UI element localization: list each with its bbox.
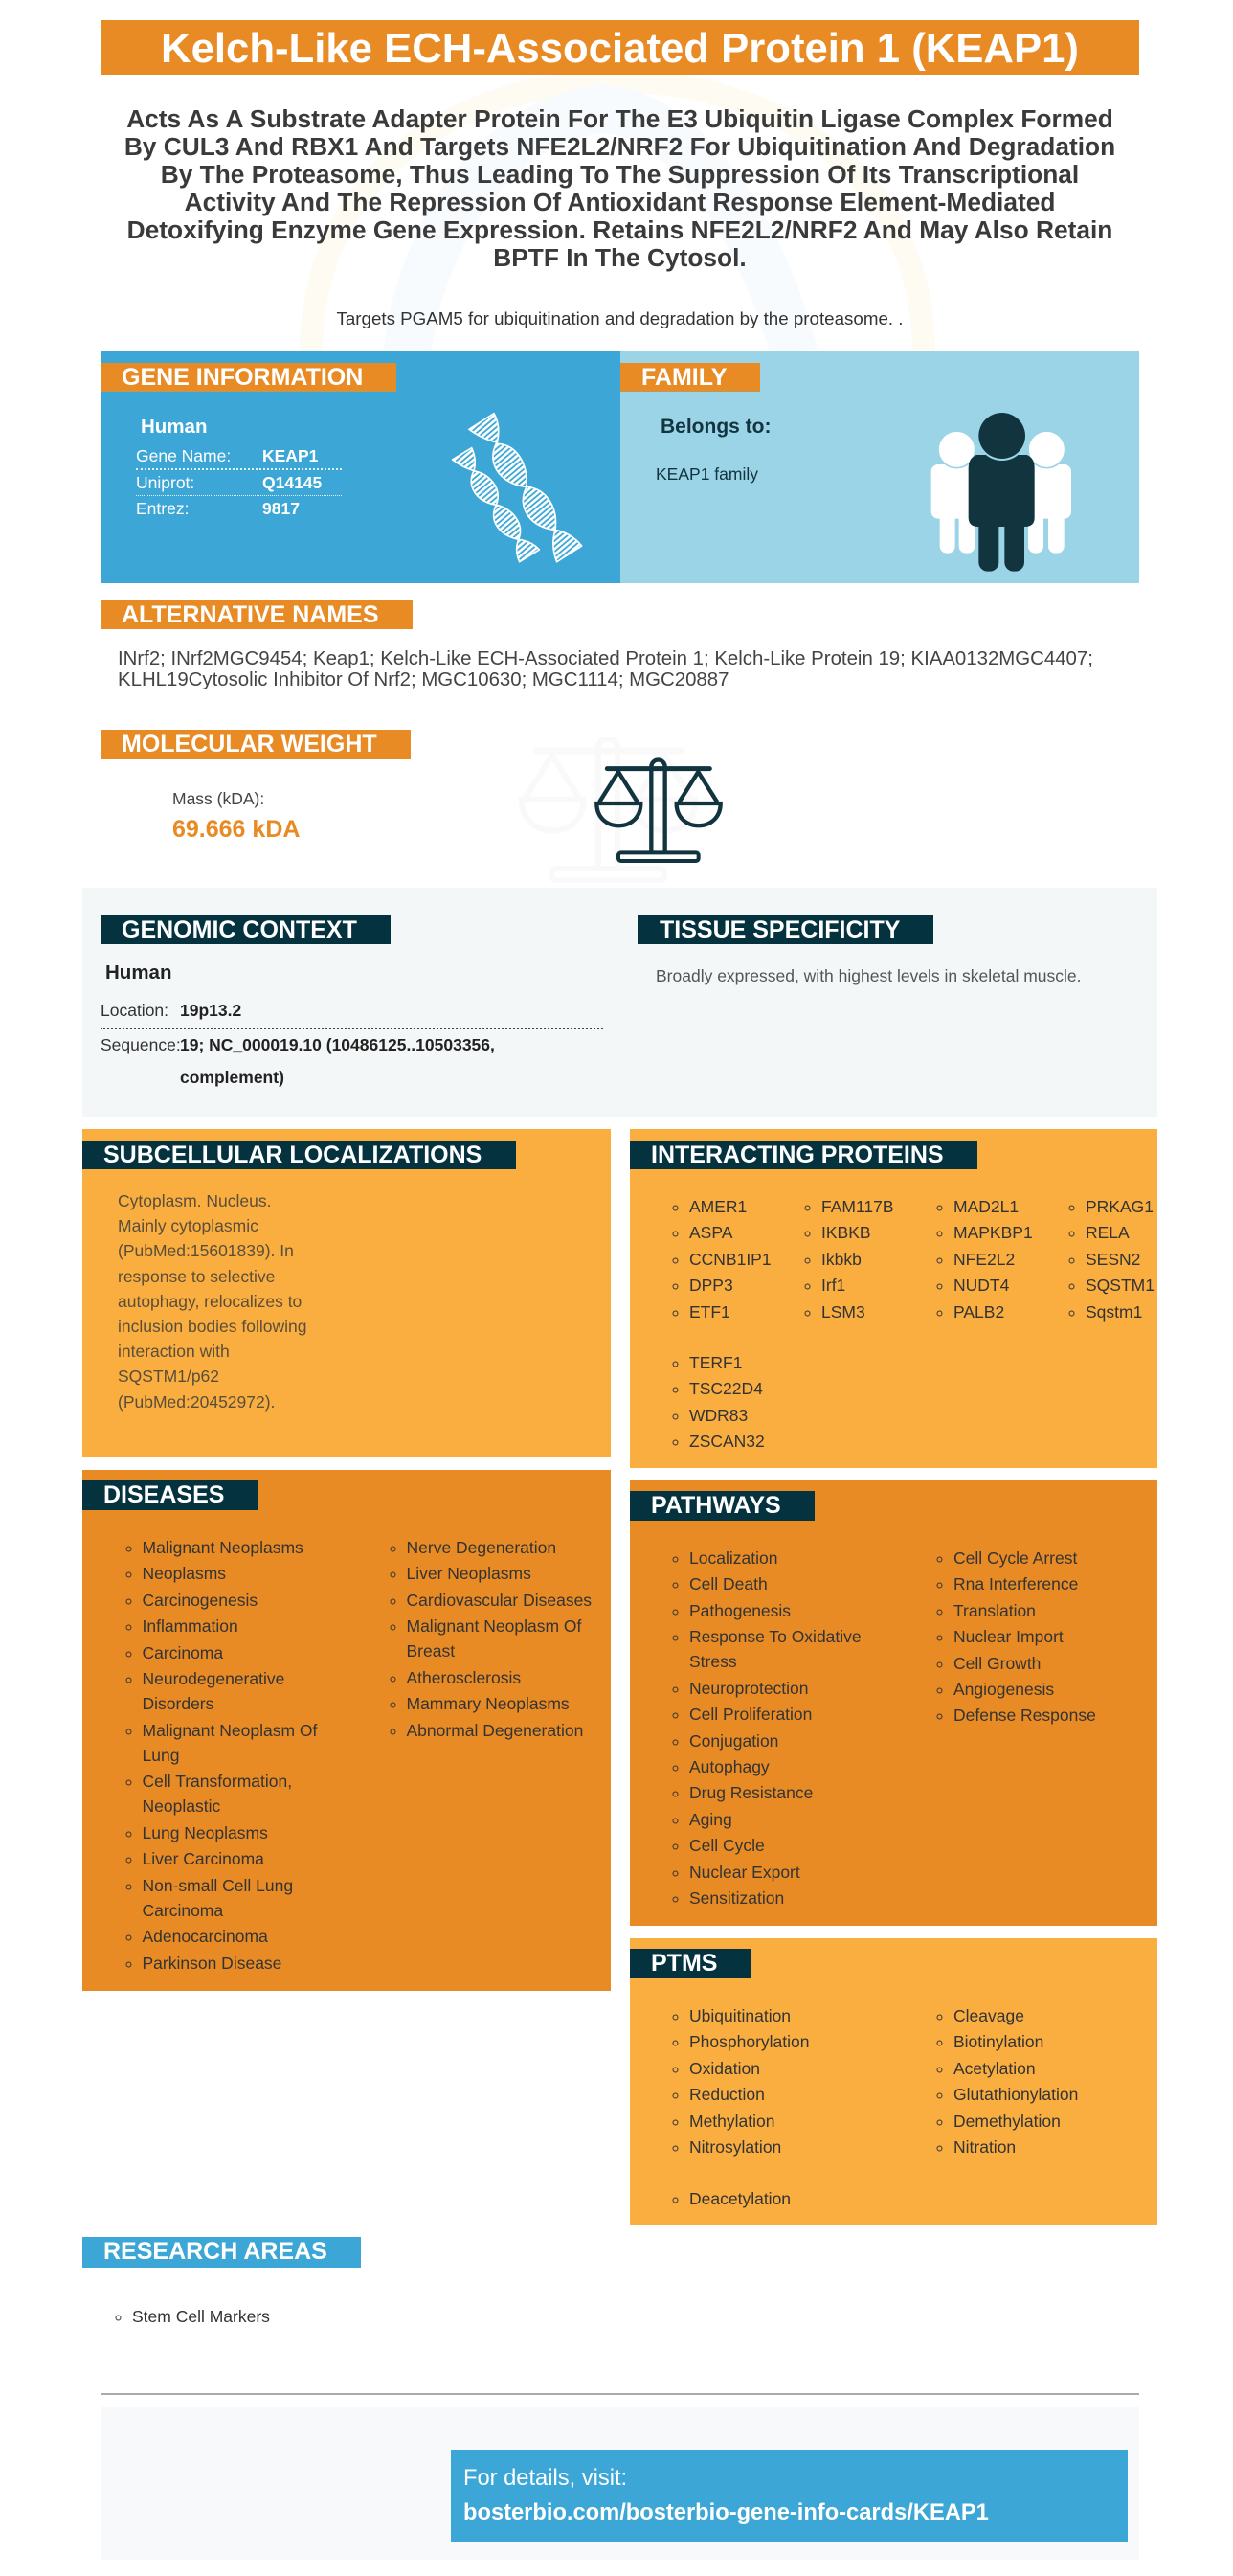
heading: molecular weight: MOLECULAR WEIGHT — [122, 731, 377, 757]
disease list column 2: Nerve Degeneration — [406, 1538, 556, 1557]
callout: details link: For details, visit: — [463, 2466, 627, 2491]
disease list column 1: Adenocarcinoma — [142, 1927, 268, 1946]
background watermark logo — [300, 75, 935, 351]
gene facts table — [136, 446, 342, 518]
description: Detoxifying Enzyme Gene Expression. Retains NFE2L2/NRF2 And May Also Retain — [127, 215, 1112, 243]
disease list column 2: Cardiovascular Diseases — [406, 1591, 592, 1610]
description — [124, 103, 1115, 272]
icon: balance scale with faint shadow — [594, 757, 723, 863]
alternative names text: KLHL19Cytosolic Inhibitor Of Nrf2; MGC10630; MGC1114; MGC20887 — [118, 669, 729, 690]
heading: research areas: RESEARCH AREAS — [103, 2238, 327, 2265]
panel: gene information — [101, 351, 620, 583]
disease list column 1: Inflammation — [142, 1616, 238, 1636]
gene facts table: Uniprot: — [136, 473, 194, 492]
protein list second group — [672, 1353, 765, 1451]
localization text — [118, 1191, 306, 1412]
disease list column 1: Parkinson Disease — [142, 1954, 281, 1973]
disease list column 1: Lung — [142, 1746, 179, 1765]
disease list column 1: Carcinogenesis — [142, 1591, 258, 1610]
PTM list column 1: Methylation — [689, 2112, 775, 2131]
panel: genomic context and tissue specificity — [82, 888, 1157, 1117]
family name: KEAP1 family — [656, 464, 758, 484]
protein list column 4: Sqstm1 — [1086, 1302, 1142, 1322]
protein list column 1: CCNB1IP1 — [689, 1250, 772, 1269]
sequence — [101, 1028, 603, 1093]
PTM list column 2: Acetylation — [953, 2059, 1036, 2078]
sequence: complement) — [180, 1068, 284, 1087]
species label: Human — [141, 416, 207, 438]
disease list column 2: Malignant Neoplasm Of — [406, 1616, 581, 1636]
gene facts table: KEAP1 — [262, 446, 318, 465]
icon: group of people — [930, 413, 1071, 572]
pathway list column 2: Cell Cycle Arrest — [953, 1548, 1077, 1568]
protein list column 4: PRKAG1 — [1086, 1197, 1154, 1216]
sequence: 19; NC_000019.10 (10486125..10503356, — [180, 1035, 495, 1054]
pathway list column 1: Stress — [689, 1652, 737, 1671]
pathway list column 2: Angiogenesis — [953, 1680, 1054, 1699]
title: Kelch-Like ECH-Associated Protein 1 (KEAP1) — [161, 25, 1079, 72]
localization text: Cytoplasm. Nucleus. — [118, 1191, 271, 1210]
protein list column 3: NUDT4 — [953, 1276, 1009, 1295]
tissue specificity text: Broadly expressed, with highest levels in skeletal muscle. — [656, 966, 1082, 985]
pathway list column 1: Neuroprotection — [689, 1679, 809, 1698]
mass label: Mass (kDA): — [172, 789, 264, 808]
sequence: Sequence: — [101, 1035, 181, 1054]
pathway list column 1: Localization — [689, 1548, 777, 1568]
PTM list column 2: Demethylation — [953, 2112, 1061, 2131]
disease list column 1: Malignant Neoplasm Of — [142, 1721, 317, 1740]
pathway list column 2: Translation — [953, 1601, 1036, 1620]
panel: subcellular localizations — [82, 1129, 611, 1457]
pathway list column 1: Aging — [689, 1810, 732, 1829]
description: Acts As A Substrate Adapter Protein For The E3 Ubiquitin Ligase Complex Formed — [126, 103, 1113, 132]
panel: family — [620, 351, 1139, 583]
disease list column 2: Breast — [406, 1641, 455, 1661]
pathway list column 2 — [936, 1548, 1096, 1725]
heading: pathways — [630, 1491, 815, 1521]
protein list column 3: MAD2L1 — [953, 1197, 1019, 1216]
protein list second group: TSC22D4 — [689, 1379, 763, 1398]
pathway list column 2: Defense Response — [953, 1706, 1096, 1725]
disease list column 2: Mammary Neoplasms — [406, 1694, 570, 1713]
PTM list column 1: Reduction — [689, 2085, 765, 2104]
genomic location: Location: — [101, 1001, 168, 1020]
disease list column 2: Liver Neoplasms — [406, 1564, 531, 1583]
PTM list column 2: Cleavage — [953, 2006, 1024, 2025]
PTM list column 2: Biotinylation — [953, 2032, 1043, 2051]
protein list second group: TERF1 — [689, 1353, 742, 1372]
heading: genomic context: GENOMIC CONTEXT — [122, 916, 357, 943]
description: By The Proteasome, Thus Leading To The Suppression Of Its Transcriptional — [161, 159, 1079, 188]
disease list column 1: Carcinoma — [142, 1643, 223, 1662]
protein list column 4: SQSTM1 — [1086, 1276, 1155, 1295]
protein list second group: ZSCAN32 — [689, 1432, 765, 1451]
localization text: interaction with — [118, 1342, 230, 1361]
gene facts table: Entrez: — [136, 499, 189, 518]
belongs to label: Belongs to: — [661, 416, 772, 438]
pathway list column 1: Response To Oxidative — [689, 1627, 862, 1646]
species label: Human — [105, 961, 171, 983]
protein list column 1: AMER1 — [689, 1197, 747, 1216]
PTM list column 1: Nitrosylation — [689, 2137, 781, 2157]
panel: diseases — [82, 1470, 611, 1991]
disease list column 1: Carcinoma — [142, 1901, 223, 1920]
panel: interacting proteins — [630, 1129, 1157, 1468]
gene facts table: Q14145 — [262, 473, 322, 492]
panel: pathways — [630, 1480, 1157, 1926]
PTM list column 2: Glutathionylation — [953, 2085, 1078, 2104]
alternative names text — [118, 648, 1093, 690]
pathway list column 1: Nuclear Export — [689, 1863, 800, 1882]
disease list column 1: Liver Carcinoma — [142, 1849, 264, 1868]
callout: details link — [451, 2450, 1128, 2542]
disease list column 1: Neoplastic — [142, 1796, 220, 1816]
heading: PTMs: PTMS — [651, 1950, 717, 1977]
heading: family — [620, 363, 760, 392]
description: By CUL3 And RBX1 And Targets NFE2L2/NRF2 For Ubiquitination And Degradation — [124, 132, 1115, 161]
gene facts table: Gene Name: — [136, 446, 231, 465]
disease list column 1: Lung Neoplasms — [142, 1823, 268, 1842]
localization text: inclusion bodies following — [118, 1317, 306, 1336]
protein list column 1: ETF1 — [689, 1302, 730, 1322]
pathway list column 1 — [672, 1548, 862, 1908]
protein list column 4: RELA — [1086, 1223, 1130, 1242]
disease list column 1: Neurodegenerative — [142, 1669, 284, 1688]
protein list column 3: MAPKBP1 — [953, 1223, 1033, 1242]
heading: gene information: GENE INFORMATION — [122, 364, 363, 391]
pathway list column 1: Cell Death — [689, 1574, 768, 1593]
localization text: Mainly cytoplasmic — [118, 1216, 258, 1235]
heading: tissue specificity: TISSUE SPECIFICITY — [660, 916, 900, 943]
heading: pathways: PATHWAYS — [651, 1492, 781, 1519]
disease list column 2: Atherosclerosis — [406, 1668, 521, 1687]
protein list column 1 — [672, 1197, 772, 1322]
PTM list column 2 — [936, 2006, 1078, 2157]
pathway list column 1: Drug Resistance — [689, 1783, 813, 1802]
pathway list column 1: Conjugation — [689, 1731, 778, 1751]
pathway list column 1: Cell Proliferation — [689, 1705, 812, 1724]
protein list column 1: ASPA — [689, 1223, 732, 1242]
heading: diseases: DISEASES — [103, 1481, 224, 1508]
protein list column 3: NFE2L2 — [953, 1250, 1015, 1269]
heading: interacting proteins: INTERACTING PROTEINS — [651, 1141, 944, 1168]
disease list column 1 — [126, 1538, 318, 1973]
pathway list column 1: Autophagy — [689, 1757, 770, 1776]
protein list column 2: Irf1 — [821, 1276, 845, 1295]
pathway list column 1: Cell Cycle — [689, 1836, 765, 1855]
footer rule — [101, 2393, 1139, 2395]
PTM list column 1 — [672, 2006, 810, 2157]
PTM list column 2: Nitration — [953, 2137, 1016, 2157]
protein list column 3: PALB2 — [953, 1302, 1004, 1322]
panel: genomic context and tissue specificity: 19p13.2 — [180, 1001, 241, 1020]
heading: PTMs — [630, 1949, 751, 1978]
disease list column 1: Non-small Cell Lung — [142, 1876, 293, 1895]
genomic location — [101, 1001, 241, 1020]
gene facts table: 9817 — [262, 499, 300, 518]
protein list column 2: LSM3 — [821, 1302, 865, 1322]
localization text: (PubMed:20452972). — [118, 1392, 275, 1412]
disease list column 1: Cell Transformation, — [142, 1772, 292, 1791]
heading: diseases — [82, 1480, 258, 1510]
heading: subcellular localizations: SUBCELLULAR LOCALIZATIONS — [103, 1141, 482, 1168]
alternative names text: INrf2; INrf2MGC9454; Keap1; Kelch-Like ECH-Associated Protein 1; Kelch-Like Protein 19; KIAA0132MGC4407; — [118, 648, 1093, 669]
panel: PTMs — [630, 1938, 1157, 2225]
research areas list: Stem Cell Markers — [132, 2307, 270, 2326]
function note: Targets PGAM5 for ubiquitination and degradation by the proteasome. . — [336, 308, 904, 328]
pathway list column 2: Nuclear Import — [953, 1627, 1064, 1646]
description: Activity And The Repression Of Antioxidant Response Element-Mediated — [185, 188, 1055, 216]
localization text: response to selective — [118, 1267, 275, 1286]
pathway list column 1: Sensitization — [689, 1888, 784, 1908]
description: BPTF In The Cytosol. — [493, 243, 747, 272]
pathway list column 1: Pathogenesis — [689, 1601, 791, 1620]
pathway list column 2: Cell Growth — [953, 1654, 1041, 1673]
PTM list column 1: Oxidation — [689, 2059, 760, 2078]
localization text: autophagy, relocalizes to — [118, 1292, 302, 1311]
protein list second group: WDR83 — [689, 1406, 748, 1425]
protein list column 2: FAM117B — [821, 1197, 894, 1216]
localization text: SQSTM1/p62 — [118, 1367, 219, 1386]
icon: DNA helices — [452, 412, 582, 563]
PTM list column 1: Phosphorylation — [689, 2032, 810, 2051]
disease list column 2 — [391, 1538, 592, 1740]
protein list column 2 — [804, 1197, 894, 1322]
mass value: 69.666 kDA — [172, 816, 300, 843]
protein list column 3 — [936, 1197, 1033, 1322]
pathway list column 2: Rna Interference — [953, 1574, 1078, 1593]
disease list column 1: Malignant Neoplasms — [142, 1538, 303, 1557]
PTM list column 1: Ubiquitination — [689, 2006, 791, 2025]
disease list column 1: Neoplasms — [142, 1564, 226, 1583]
callout: details link: bosterbio.com/bosterbio-gene-info-cards/KEAP1 — [463, 2500, 989, 2525]
protein list column 2: IKBKB — [821, 1223, 871, 1242]
disease list column 2: Abnormal Degeneration — [406, 1721, 583, 1740]
protein list column 2: Ikbkb — [821, 1250, 862, 1269]
disease list column 1: Disorders — [142, 1694, 213, 1713]
localization text: (PubMed:15601839). In — [118, 1241, 294, 1260]
protein list column 1: DPP3 — [689, 1276, 733, 1295]
heading: alternative names: ALTERNATIVE NAMES — [122, 601, 379, 628]
PTM list extra item: Deacetylation — [689, 2189, 791, 2208]
footer panel — [101, 2407, 1139, 2560]
protein list column 4: SESN2 — [1086, 1250, 1140, 1269]
heading: family: FAMILY — [641, 364, 727, 391]
protein list column 4 — [1068, 1197, 1155, 1322]
